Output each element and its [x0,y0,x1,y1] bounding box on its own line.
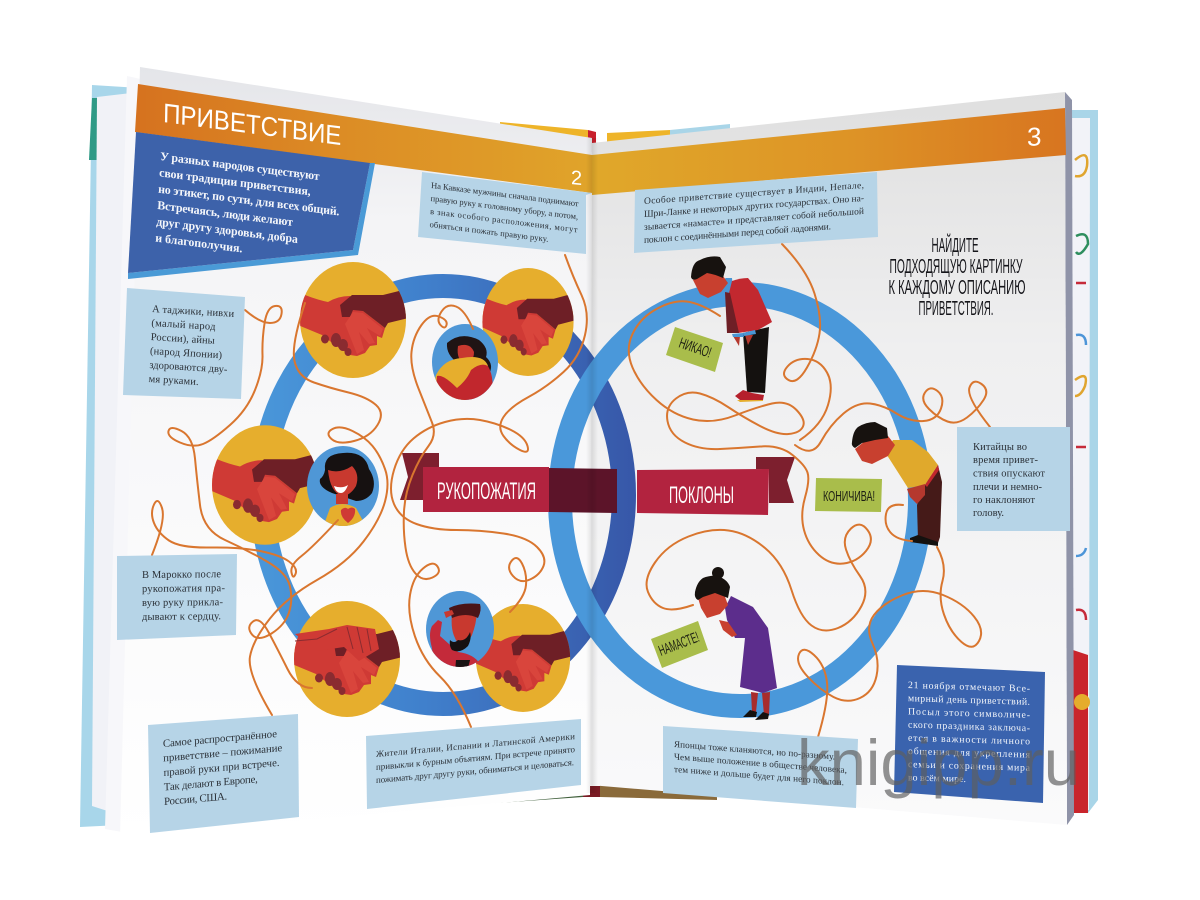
winding strings [152,244,990,737]
speech label: namaste: НАМАСТЕ! [656,629,702,660]
handshake circle bottom right [470,604,576,712]
text block: India: Шри-Ланке и некоторых других государствах. Оно на- [644,194,864,220]
text block: World Hello Day: мирный день приветствий. [908,693,1030,708]
panel: intro [128,132,375,279]
instruction: find the picture: НАЙДИТЕ [932,233,978,257]
text block: China: плечи и немно- [973,482,1042,493]
text block: India: зывается «намасте» и представляет собой небольшой [644,206,864,233]
header band, left page [135,84,592,193]
text block: Tajiks: (малый народ [151,318,216,333]
text block: China: время привет- [973,455,1038,466]
text block: most common greeting: России, США. [164,791,227,808]
speech label: konnichiwa: КОНИЧИВА! [823,488,875,505]
text block: Morocco: В Марокко после [142,569,221,581]
text block: Japan [663,726,858,808]
ring: handshakes [262,286,624,704]
instruction: find the picture: К КАЖДОМУ ОПИСАНИЮ [888,277,1026,299]
speech label: nikao [666,327,723,372]
left page [120,67,592,837]
banner: bows [637,457,795,515]
figure: woman in purple dress bowing [695,567,777,720]
handshake circle middle left [205,425,325,545]
text block: World Hello Day [894,665,1045,803]
text block: Italy and Spain: привыкли к бурным объятиям. При встрече принято [376,744,575,772]
instruction: find the picture: ПОДХОДЯЩУЮ КАРТИНКУ [890,256,1023,278]
handshake circle top left [293,262,413,378]
text block: World Hello Day: во всём мире. [908,772,966,785]
text block: most common greeting: Так делают в Европе, [164,773,258,793]
instruction: find the picture: ПРИВЕТСТВИЯ. [918,298,994,320]
ring: bows [560,294,920,706]
text block: most common greeting: Самое распространённое [163,728,277,750]
text block: Tajiks: мя руками. [148,374,199,388]
book gutter shading [586,138,598,793]
figure: man in yellow jumper bowing [852,422,942,546]
text block: World Hello Day: ского праздника заключа- [908,720,1030,734]
banner: bows: ПОКЛОНЫ [669,482,734,509]
banner: handshakes [400,453,549,512]
portrait: hugging couple [432,324,498,402]
instruction: find the picture [888,233,1026,320]
text block: Caucasus: в знак особого расположения, могут [430,206,578,235]
text block: Tajiks [123,288,245,399]
text block: Japan: Японцы тоже кланяются, но по-разному. [674,739,835,762]
page number 3: 3 [1027,121,1041,152]
text block: World Hello Day: семьи и сохранения мира [908,759,1031,774]
text block: Morocco [117,554,237,640]
text block: Japan: тем ниже и дольше будет для него поклон. [674,764,844,787]
panel: intro: Встречаясь, люди желают [157,198,293,229]
text block: China: голову. [973,508,1004,519]
panel: intro: свои традиции приветствия, [159,165,311,198]
handshake circle bottom left, two-handed [287,601,407,717]
coloured endpapers behind the spine [367,122,730,812]
watermark: knigipp.ru [797,726,1080,799]
text block: Tajiks: России), айны [150,332,215,347]
right page [590,92,1067,825]
text block: India: Особое приветствие существует в Индии, Непале, [644,180,864,207]
text block: Tajiks: А таджики, нивхи [152,304,235,320]
text block: China: го наклоняют [973,495,1035,506]
book cover and fore edge, right [1065,92,1098,825]
text block: most common greeting [148,714,299,833]
figure: man in red jacket bowing [691,256,772,402]
panel: intro: но этикет, по сути, для всех общий. [158,182,340,218]
text block: Caucasus: На Кавказе мужчины сначала поднимают [431,180,579,209]
text block: Italy and Spain: Жители Италии, Испании и Латинской Америки [376,731,575,759]
speech label: nikao: НИКАО! [677,335,713,362]
text block: Caucasus: правую руку к головному убору, а потом, [430,193,578,221]
panel: intro: друг другу здоровья, добра [156,214,298,246]
text block: Italy and Spain [366,719,581,809]
text block: World Hello Day: ется в важности личного [908,733,1030,747]
text block: Italy and Spain: пожимать друг другу руки, обниматься и целоваться. [376,757,574,785]
book cover and under-pages, left [80,76,145,832]
text block: most common greeting: приветствие – пожимание [163,742,283,764]
text block: most common greeting: правой руки при встрече. [163,757,280,779]
speech label: namaste [651,621,708,668]
page number 2: 2 [571,167,582,190]
text block: Caucasus [418,172,592,254]
portrait: smiling woman [307,446,379,530]
text block: Japan: Чем выше положение в обществе человека, [674,752,847,775]
text block: China: ствия опускают [973,468,1045,480]
text block: China: Китайцы во [973,442,1027,453]
text block: World Hello Day: общения для укрепления [908,746,1030,761]
text block: Tajiks: (народ Японии) [150,346,223,361]
text block: Caucasus: обняться и пожать правую руку. [429,219,549,244]
banner: handshakes: РУКОПОЖАТИЯ [437,478,536,505]
text block: China [957,427,1070,531]
title: ПРИВЕТСТВИЕ [163,98,342,151]
text block: World Hello Day: 21 ноября отмечают Все- [908,680,1030,695]
text block: Morocco: дывают к сердцу. [142,611,221,623]
banner band across the gutter [549,468,617,513]
panel: intro: У разных народов существуют [160,149,320,183]
speech label: konnichiwa [815,478,882,512]
text block: Morocco: рукопожатия пра- [142,583,225,595]
header band, right page [592,108,1066,195]
handshake circle top right [476,268,580,376]
text block: Morocco: вую руку прикла- [142,597,223,609]
portrait: man tipping hat [426,591,494,672]
panel: intro: и благополучия. [155,230,243,256]
text block: Tajiks: здороваются дву- [149,360,228,376]
text block: World Hello Day: Посыл этого символиче- [908,706,1030,721]
text block: India: поклон с соединёнными перед собой ладонями. [644,221,831,246]
text block: India [634,172,878,253]
